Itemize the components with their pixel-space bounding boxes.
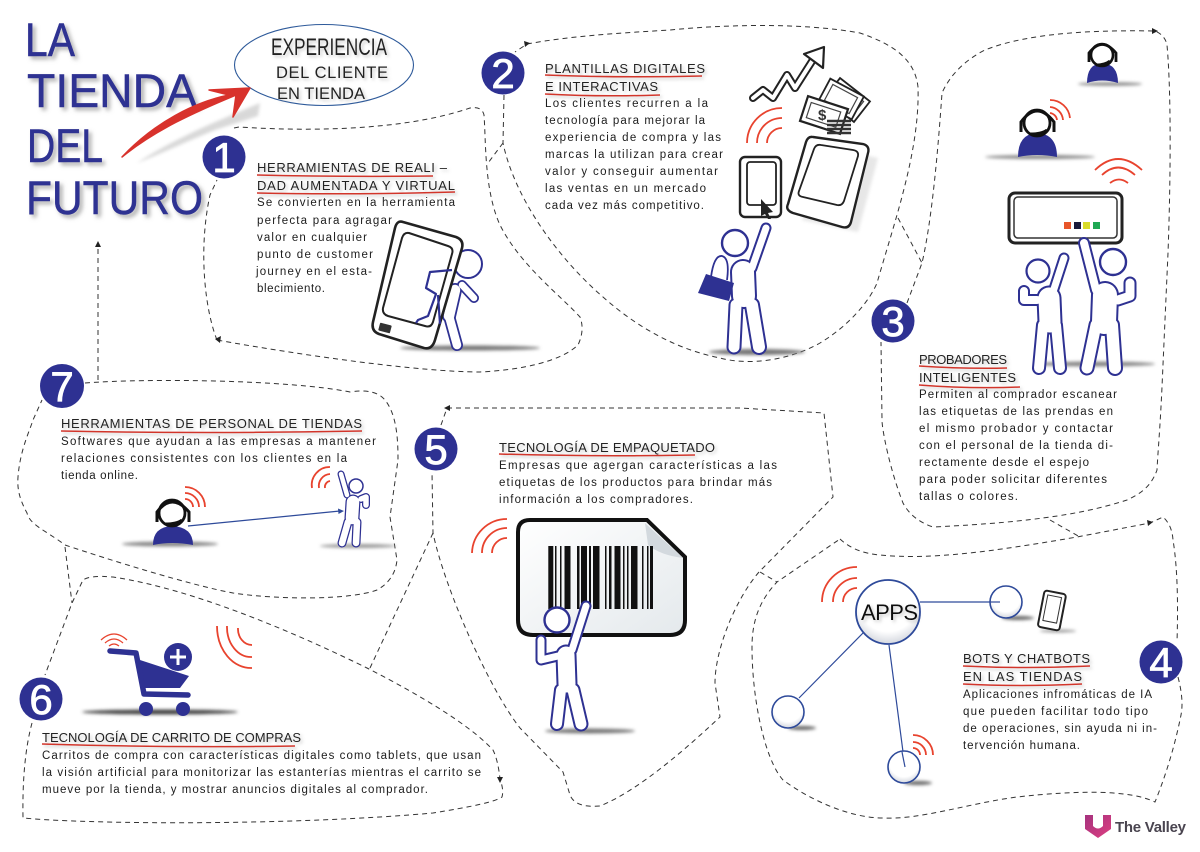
logo: The Valley bbox=[1085, 815, 1187, 838]
title: FUTURO bbox=[26, 171, 203, 224]
icon: money bills: $ bbox=[818, 107, 827, 124]
text 3: rectamente desde el espejo bbox=[919, 457, 1089, 469]
text 6 bbox=[42, 750, 481, 796]
icon: agent middle bbox=[985, 100, 1095, 159]
heading 4: EN LAS TIENDAS bbox=[963, 669, 1082, 684]
number badge 5 bbox=[414, 426, 458, 473]
bubble: experiencia del cliente en tienda bbox=[234, 24, 414, 106]
panel 7: personal de tiendas bbox=[40, 363, 396, 548]
text 2: valor y conseguir aumentar bbox=[545, 166, 718, 178]
text 5: información a los compradores. bbox=[499, 494, 693, 506]
text 5: etiquetas de los productos para brindar más bbox=[499, 477, 772, 489]
text 3 bbox=[919, 389, 1117, 503]
title: DEL bbox=[27, 119, 103, 172]
logo: The Valley: The Valley bbox=[1115, 819, 1187, 836]
icon: signal arcs over mirror bbox=[1095, 159, 1142, 183]
node: right bbox=[990, 586, 1034, 620]
text 7: tienda online. bbox=[61, 470, 138, 482]
number badge 6 bbox=[20, 676, 62, 723]
text 4 bbox=[963, 689, 1157, 752]
heading 4: BOTS Y CHATBOTS bbox=[963, 651, 1090, 666]
text 1 bbox=[255, 197, 456, 295]
text 2: Los clientes recurren a la bbox=[545, 98, 709, 110]
icon: signal arcs bbox=[822, 567, 933, 755]
number badge 1 bbox=[202, 134, 246, 181]
bubble: experiencia del cliente en tienda: EN TIENDA bbox=[277, 85, 365, 103]
heading 1: HERRAMIENTAS DE REALI – bbox=[257, 160, 448, 175]
icon: two customers bbox=[1024, 243, 1155, 368]
text 7: Softwares que ayudan a las empresas a mantener bbox=[61, 436, 376, 448]
number badge 3: 3 bbox=[881, 298, 905, 345]
node: bottom bbox=[888, 751, 932, 785]
heading 4 bbox=[963, 651, 1090, 686]
text 4: tervención humana. bbox=[963, 740, 1080, 752]
text 1: punto de customer bbox=[257, 249, 373, 261]
text 1: blecimiento. bbox=[257, 283, 325, 295]
icon: barcode label bbox=[500, 520, 740, 660]
icon: signal arcs bbox=[472, 519, 507, 553]
text 3: para poder solicitar diferentes bbox=[919, 474, 1107, 486]
number badge 1: 1 bbox=[212, 134, 236, 181]
text 2: tecnología para mejorar la bbox=[545, 115, 706, 127]
text 7 bbox=[61, 436, 376, 482]
title bbox=[25, 13, 203, 224]
text 2 bbox=[545, 98, 723, 212]
text 1: valor en cualquier bbox=[257, 232, 367, 244]
text 4: de operaciones, sin ayuda ni in- bbox=[963, 723, 1157, 735]
text 5 bbox=[499, 460, 777, 506]
icon: signal arcs bbox=[217, 626, 252, 668]
icon: signal arcs bbox=[747, 108, 782, 143]
number badge 5: 5 bbox=[424, 426, 448, 473]
text 3: las etiquetas de las prendas en bbox=[919, 406, 1113, 418]
node: left bbox=[772, 696, 816, 730]
icon: big tablet bbox=[787, 137, 878, 232]
number badge 2: 2 bbox=[491, 50, 515, 97]
panel 3: probadores inteligentes bbox=[872, 44, 1155, 503]
text 3: el mismo probador y contactar bbox=[919, 423, 1113, 435]
number badge 4 bbox=[1140, 639, 1182, 686]
heading 6: TECNOLOGÍA DE CARRITO DE COMPRAS bbox=[42, 730, 301, 745]
panel 1: realidad aumentada bbox=[202, 134, 540, 350]
network diagram bbox=[772, 567, 1034, 785]
title: LA bbox=[25, 13, 76, 66]
icon: rising chart arrow bbox=[753, 47, 824, 98]
number badge 3 bbox=[872, 298, 914, 345]
node: apps: APPS bbox=[861, 600, 918, 625]
heading 2 bbox=[545, 61, 705, 96]
text 7: relaciones consistentes con los clientes en la bbox=[61, 453, 348, 465]
panel 2: plantillas digitales bbox=[482, 47, 878, 355]
bubble: experiencia del cliente en tienda: EXPERIENCIA bbox=[271, 34, 387, 61]
panel 6: carrito de compras bbox=[20, 626, 481, 796]
panel 5: tecnologia de empaquetado bbox=[414, 426, 777, 734]
number badge 2 bbox=[482, 50, 524, 97]
heading 1 bbox=[257, 160, 455, 194]
text 4: Aplicaciones infromáticas de IA bbox=[963, 689, 1152, 701]
text 4: que pueden facilitar todo tipo bbox=[963, 706, 1148, 718]
barcode bars bbox=[548, 546, 653, 609]
text 2: marcas la utilizan para crear bbox=[545, 149, 723, 161]
icon: smart mirror bbox=[1009, 193, 1122, 243]
heading 3 bbox=[919, 352, 1020, 388]
icon: customer scanning bbox=[541, 606, 635, 734]
text 1: journey en el esta- bbox=[255, 266, 372, 278]
icon: shopper with bag bbox=[698, 228, 805, 355]
number badge 7: 7 bbox=[50, 363, 74, 410]
text 6: la visión artificial para monitorizar las estanterías mientras el carrito se bbox=[42, 767, 481, 779]
text 1: perfecta para agragar bbox=[257, 215, 392, 227]
icon: customer bbox=[312, 467, 396, 548]
icon: runner pushing tablet bbox=[373, 222, 540, 350]
arrow: red arrow to bubble bbox=[122, 88, 260, 163]
text 5: Empresas que agergan características a las bbox=[499, 460, 777, 472]
text 3: con el personal de la tienda di- bbox=[919, 440, 1113, 452]
icon: agent bbox=[122, 487, 218, 546]
text 3: Permiten al comprador escanear bbox=[919, 389, 1117, 401]
text 1: Se convierten en la herramienta bbox=[257, 197, 456, 209]
text 6: Carritos de compra con características digitales como tablets, que usan bbox=[42, 750, 481, 762]
text 2: las ventas en un mercado bbox=[545, 183, 706, 195]
heading 1: DAD AUMENTADA Y VIRTUAL bbox=[257, 178, 455, 193]
heading 3: INTELIGENTES bbox=[919, 370, 1016, 385]
heading 2: E INTERACTIVAS bbox=[545, 79, 658, 94]
icon: phone bbox=[1038, 590, 1076, 632]
text 2: cada vez más competitivo. bbox=[545, 200, 704, 212]
title: TIENDA bbox=[27, 64, 198, 117]
bubble: experiencia del cliente en tienda: DEL CLIENTE bbox=[276, 64, 388, 82]
icon: shopping cart bbox=[82, 634, 238, 716]
text 3: tallas o colores. bbox=[919, 491, 1018, 503]
number badge 4: 4 bbox=[1149, 639, 1173, 686]
text 6: mueve por la tienda, y mostrar anuncios digitales al comprador. bbox=[42, 784, 428, 796]
heading 5: TECNOLOGÍA DE EMPAQUETADO bbox=[499, 440, 715, 455]
heading 2: PLANTILLAS DIGITALES bbox=[545, 61, 705, 76]
arrow: agent to customer bbox=[188, 508, 344, 526]
icon: small phone with cursor bbox=[740, 157, 781, 219]
node: apps bbox=[856, 580, 920, 644]
heading 3: PROBADORES bbox=[919, 352, 1007, 367]
number badge 7 bbox=[40, 363, 84, 410]
text 2: experiencia de compra y las bbox=[545, 132, 721, 144]
icon: money bills bbox=[800, 78, 870, 134]
heading 7: HERRAMIENTAS DE PERSONAL DE TIENDAS bbox=[61, 416, 362, 431]
number badge 6: 6 bbox=[29, 676, 53, 723]
panel 4: bots y chatbots bbox=[772, 567, 1182, 785]
icon: agent top bbox=[1078, 44, 1142, 86]
